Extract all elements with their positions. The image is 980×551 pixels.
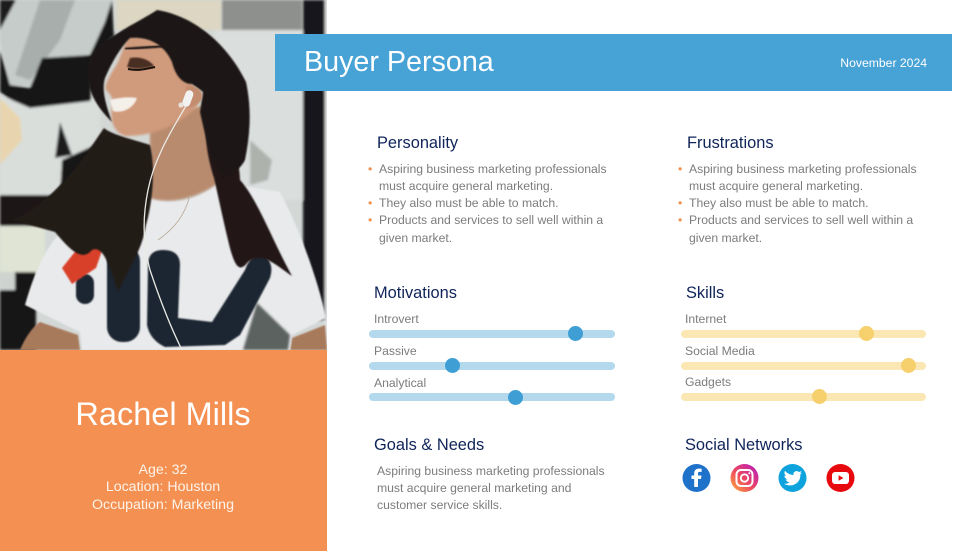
personality bullets: Products and services to sell well within a (379, 213, 603, 227)
neck (150, 105, 222, 201)
panel: persona profile (0, 350, 326, 551)
heading: skills: Skills (686, 284, 724, 302)
date: November 2024 (840, 56, 927, 70)
persona details: Occupation: Marketing (92, 497, 234, 513)
earbud and cable (144, 104, 187, 350)
personality bullets: • (368, 196, 372, 210)
shirt logo (76, 246, 271, 347)
icon: twitter (778, 464, 806, 492)
slider: internet: Internet (685, 312, 726, 326)
icon: facebook (682, 464, 710, 492)
hair top mass (87, 10, 250, 178)
slider: social media: Social Media (685, 344, 755, 358)
goals text: must acquire general marketing and (377, 481, 571, 495)
goals text: Aspiring business marketing professionals (377, 464, 605, 478)
panel: motivations (369, 284, 615, 405)
persona name: Rachel Mills (75, 396, 251, 432)
panel: frustrations (678, 134, 917, 245)
slider: internet (681, 312, 926, 341)
gap between arm and torso (243, 303, 290, 350)
slider: analytical: Analytical (374, 376, 426, 390)
frustrations bullets: • (678, 213, 682, 227)
social icons (682, 464, 854, 492)
persona details (92, 462, 234, 513)
frustrations bullets: Aspiring business marketing professionals (689, 162, 917, 176)
panel: personality (368, 134, 607, 245)
personality bullets: must acquire general marketing. (379, 179, 553, 193)
hair back right (204, 131, 292, 276)
frustrations bullets: • (678, 196, 682, 210)
heading: social networks: Social Networks (685, 436, 803, 454)
shirt (25, 182, 326, 350)
panel: goals and needs (374, 436, 605, 512)
frustrations bullets (678, 162, 917, 245)
slider: passive: Passive (374, 344, 417, 358)
frustrations bullets: given market. (689, 231, 762, 245)
frustrations bullets: They also must be able to match. (689, 196, 869, 210)
header banner (275, 34, 952, 91)
frustrations bullets: • (678, 162, 682, 176)
personality bullets (368, 162, 607, 245)
personality bullets: • (368, 162, 372, 176)
face (105, 35, 198, 136)
heading: personality: Personality (377, 134, 458, 152)
persona details: Age: 32 (139, 462, 187, 478)
panel: skills (681, 284, 926, 404)
personality bullets: Aspiring business marketing professionals (379, 162, 607, 176)
personality bullets: They also must be able to match. (379, 196, 559, 210)
slider: analytical (369, 376, 615, 405)
photo: woman with headphones (0, 0, 327, 350)
persona details: Location: Houston (106, 479, 220, 495)
heading: frustrations: Frustrations (687, 134, 774, 152)
ear (186, 86, 202, 108)
hair left mass (12, 128, 153, 292)
goals text (377, 464, 605, 512)
slider: social media (681, 344, 926, 373)
slider: introvert: Introvert (374, 312, 419, 326)
personality bullets: given market. (379, 231, 452, 245)
slider: passive (369, 344, 615, 373)
arms (20, 322, 80, 350)
slider: introvert (369, 312, 615, 341)
title: Buyer Persona (304, 46, 494, 78)
slider: gadgets (681, 375, 926, 404)
frustrations bullets: must acquire general marketing. (689, 179, 863, 193)
mouth (110, 97, 137, 112)
icon: youtube (826, 464, 854, 492)
panel: social networks (682, 436, 854, 492)
icon: instagram (730, 464, 758, 492)
frustrations bullets: Products and services to sell well within a (689, 213, 913, 227)
personality bullets: • (368, 213, 372, 227)
slider: gadgets: Gadgets (685, 375, 731, 389)
heading: goals and needs: Goals & Needs (374, 436, 484, 454)
eye shadow and brow (127, 57, 154, 69)
goals text: customer service skills. (377, 498, 502, 512)
heading: motivations: Motivations (374, 284, 457, 302)
